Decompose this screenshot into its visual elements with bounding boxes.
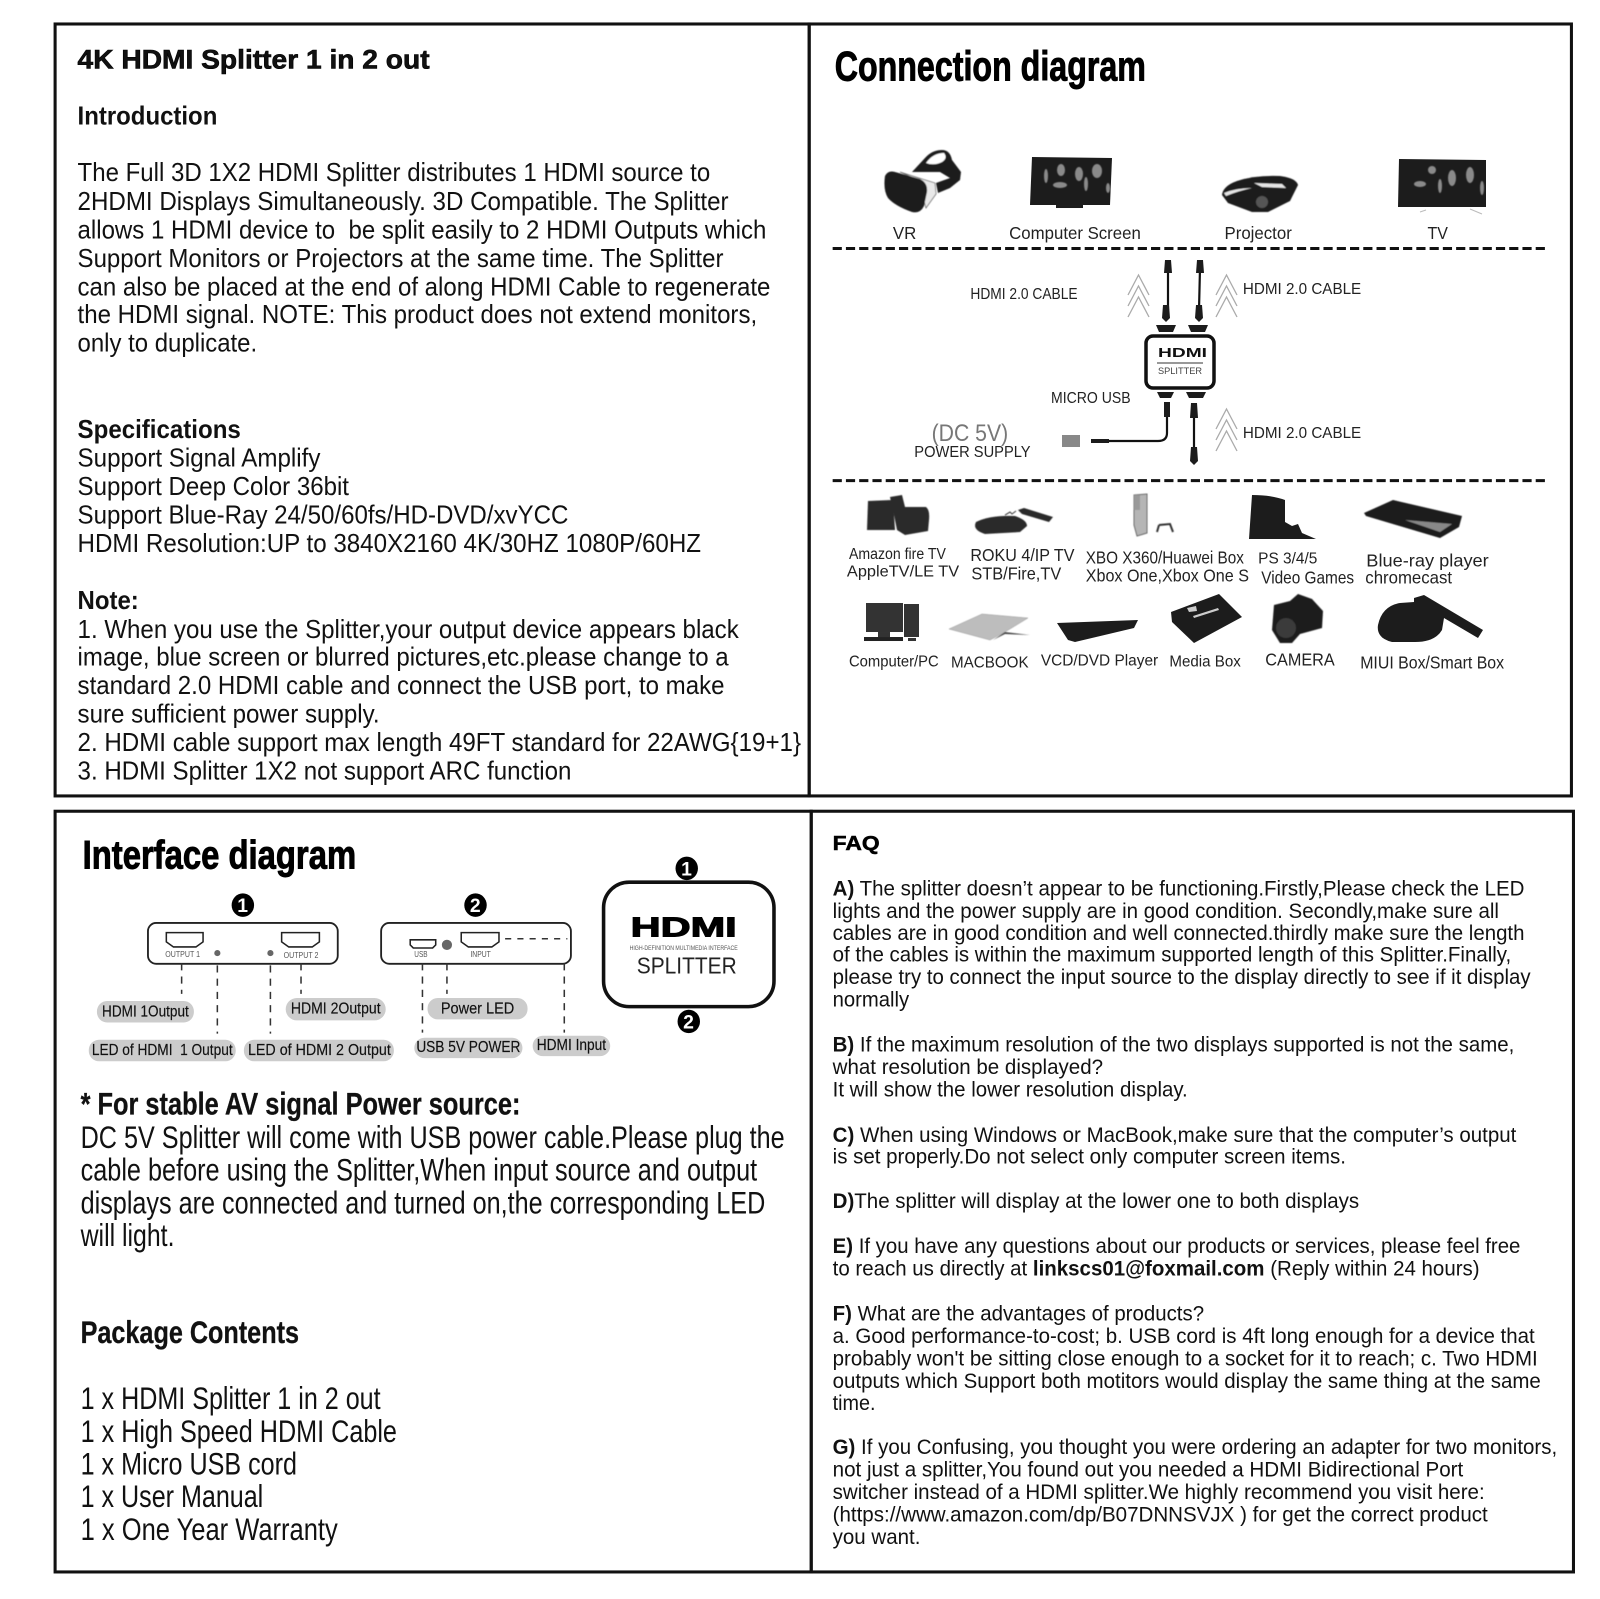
icon: VR headset [884, 150, 961, 212]
icon: splitter large: HDMI [631, 912, 737, 943]
text block: power source: DC 5V Splitter will come with USB power cable.Please plug the [81, 1119, 785, 1155]
text block: answer B [832, 1033, 1514, 1101]
text block: package list: 1 x User Manual [81, 1478, 263, 1514]
label: roku: ROKU 4/IP TV [970, 545, 1075, 565]
heading: specifications: Specifications [78, 416, 241, 444]
heading: interface diagram: Interface diagram [83, 833, 356, 877]
text block: answer E [833, 1234, 1520, 1281]
text block: note: sure sufficient power supply. [78, 700, 380, 728]
text block: note: 3. HDMI Splitter 1X2 not support ARC function [78, 758, 571, 786]
icon: number 1 top: 1 [681, 859, 692, 881]
label: TV: TV [1428, 223, 1448, 243]
panel: connection diagram [833, 43, 1547, 672]
icon: dvd player [1057, 620, 1138, 642]
label: power supply: POWER SUPPLY [914, 444, 1031, 461]
text block: answer G: switcher instead of a HDMI splitter.We highly recommend you visit here: [833, 1480, 1485, 1504]
label: amazon fire tv: Amazon fire TV [849, 546, 947, 563]
text block: answer F: outputs which Support both motitors would display the same thing at the same [833, 1369, 1541, 1393]
heading: connection diagram: Connection diagram [835, 43, 1146, 90]
text block: introduction: the HDMI signal. NOTE: This product does not extend monitors, [78, 301, 757, 329]
icon: number 2 bottom: 2 [683, 1012, 694, 1034]
icon: number 1 [232, 893, 254, 917]
text block: introduction: only to duplicate. [78, 330, 257, 358]
heading: introduction: Introduction [78, 102, 217, 130]
icon: splitter with cables [1062, 260, 1214, 465]
panel: interface diagram [80, 833, 785, 1547]
label: vcd: VCD/DVD Player [1041, 652, 1158, 669]
text block: answer B: what resolution be displayed? [832, 1055, 1103, 1079]
text block: answer G: G) If you Confusing, you thought you were ordering an adapter for two monitors, [833, 1435, 1557, 1459]
label: HDMI cable right: HDMI 2.0 CABLE [1243, 281, 1361, 298]
text block: answer C: is set properly.Do not select only computer screen items. [833, 1144, 1346, 1168]
heading: package contents: Package Contents [81, 1314, 299, 1350]
text block: specifications: Support Blue-Ray 24/50/60fs/HD-DVD/xvYCC [78, 501, 568, 529]
callout: LED of HDMI 2: LED of HDMI 2 Output [248, 1042, 392, 1059]
panel: frame bottom-left [55, 811, 811, 1572]
icon: TV [1398, 159, 1486, 214]
label: DC 5V: (DC 5V) [932, 420, 1008, 447]
text block: answer G: not just a splitter,You found out you needed a HDMI Bidirectional Port [833, 1458, 1463, 1482]
icon: number 2: 2 [470, 895, 481, 917]
icon: computer screen [1030, 157, 1112, 208]
text block: specifications: HDMI Resolution:UP to 3840X2160 4K/30HZ 1080P/60HZ [78, 530, 701, 558]
icon: input side: INPUT [470, 950, 491, 959]
text block: introduction: The Full 3D 1X2 HDMI Splitter distributes 1 HDMI source to [78, 159, 710, 187]
text block: note: 1. When you use the Splitter,your output device appears black [78, 616, 739, 644]
text block: answer G: (https://www.amazon.com/dp/B07DNNSVJX ) for get the correct product [833, 1502, 1488, 1526]
text block: power source: cable before using the Splitter,When input source and output [81, 1152, 757, 1188]
label: xbox: Xbox One,Xbox One S [1086, 566, 1249, 586]
icon: input side: USB [414, 950, 428, 959]
text block: introduction: can also be placed at the end of along HDMI Cable to regenerate [78, 274, 770, 302]
label: VR: VR [893, 223, 916, 243]
icon: splitter large: SPLITTER [637, 952, 737, 978]
label: computer: Computer/PC [849, 653, 939, 670]
text block: answer A [833, 876, 1531, 1012]
label: HDMI cable bottom: HDMI 2.0 CABLE [1243, 425, 1361, 442]
label: playstation [1258, 550, 1354, 588]
label: blu-ray [1365, 550, 1489, 588]
icon: computer [864, 603, 919, 641]
label: media box: Media Box [1169, 653, 1241, 670]
text block: introduction [78, 159, 770, 358]
text block: answer A: of the cables is within the maximum supported length of this Splitter.Finally, [833, 943, 1511, 967]
text block: answer F: probably won't be sitting close enough to a socket for it to reach; c. Two HDMI [833, 1346, 1538, 1370]
label: playstation: Video Games [1261, 568, 1354, 588]
text block: note: 2. HDMI cable support max length 49FT standard for 22AWG{19+1} [78, 729, 801, 757]
text block: answer E: to reach us directly at linkscs01@foxmail.com (Reply within 24 hours) [833, 1257, 1480, 1281]
text block: answer F: a. Good performance-to-cost; b. USB cord is 4ft long enough for a device that [833, 1324, 1535, 1348]
text block: answer A: please try to connect the input source to the display directly to see if it display [833, 965, 1531, 989]
icon: camera [1272, 594, 1323, 643]
text block: answer C: C) When using Windows or MacBook,make sure that the computer’s output [833, 1123, 1516, 1147]
label: playstation: PS 3/4/5 [1258, 550, 1317, 567]
label: HDMI logo small: HDMI [1158, 345, 1207, 360]
heading: FAQ: FAQ [833, 833, 880, 855]
icon: blu-ray player [1364, 500, 1462, 538]
label: xbox [1086, 547, 1249, 586]
text block: answer F: time. [833, 1391, 876, 1415]
callout: power LED [428, 998, 528, 1019]
text block: answer B: It will show the lower resolution display. [833, 1077, 1188, 1101]
panel: frame top-right [809, 24, 1571, 796]
text block: answer B: B) If the maximum resolution of the two displays supported is not the same, [833, 1033, 1514, 1057]
text block: answer A: cables are in good condition and well connected.thirdly make sure the length [833, 921, 1524, 945]
text block: specifications: Support Deep Color 36bit [78, 473, 349, 501]
callout: LED of HDMI 1: LED of HDMI 1 Output [92, 1042, 233, 1059]
text block: answer A: lights and the power supply are in good condition. Secondly,make sure all [833, 899, 1499, 923]
text block: package list: 1 x One Year Warranty [81, 1511, 338, 1547]
label: camera: CAMERA [1265, 649, 1335, 669]
icon: number 1 top [676, 857, 698, 881]
text block: note: standard 2.0 HDMI cable and connect the USB port, to make [78, 672, 724, 700]
text block: answer A: normally [833, 988, 909, 1012]
text block: package list [81, 1380, 397, 1547]
icon: chevrons [1128, 275, 1237, 451]
title: 4K HDMI Splitter 1 in 2 out [78, 44, 430, 74]
text block: package list: 1 x High Speed HDMI Cable [81, 1413, 397, 1449]
label: amazon fire tv [847, 546, 960, 581]
text block: note: image, blue screen or blurred pictures,etc.please change to a [78, 643, 729, 671]
icon: splitter large: HIGH-DEFINITION MULTIMEDIA INTERFACE [630, 945, 738, 952]
text block: specifications: Support Signal Amplify [78, 444, 321, 472]
text block: package list: 1 x Micro USB cord [81, 1445, 297, 1481]
label: roku [970, 545, 1075, 584]
callout: HDMI input: HDMI Input [537, 1037, 607, 1054]
callout: HDMI 1 output: HDMI 1Output [102, 1003, 189, 1020]
text block: answer F: F) What are the advantages of products? [833, 1301, 1204, 1325]
panel: frame bottom-right [811, 811, 1573, 1572]
heading: note: Note: [78, 587, 139, 615]
text block: introduction: 2HDMI Displays Simultaneously. 3D Compatible. The Splitter [78, 188, 729, 216]
text block: introduction: allows 1 HDMI device to be split easily to 2 HDMI Outputs which [78, 216, 766, 244]
text block: answer D: D)The splitter will display at the lower one to both displays [833, 1189, 1359, 1213]
label: HDMI cable left: HDMI 2.0 CABLE [970, 286, 1078, 303]
text block: answer E: E) If you have any questions about our products or services, please feel free [833, 1234, 1520, 1258]
label: macbook: MACBOOK [951, 654, 1029, 671]
text block: power source: will light. [80, 1217, 174, 1253]
text block: answer C [833, 1123, 1516, 1168]
icon: macbook [949, 614, 1030, 640]
panel: introduction and specifications [78, 44, 801, 786]
icon: number 2 [464, 893, 487, 917]
icon: splitter large [604, 882, 774, 1007]
icon: input side [381, 923, 571, 964]
icon: playstation [1249, 495, 1316, 539]
icon: miui box [1378, 595, 1483, 642]
text block: specifications [78, 444, 701, 558]
text block: power source [80, 1119, 785, 1253]
icon: output side [148, 923, 338, 964]
icon: output side: OUTPUT 1 [165, 950, 200, 959]
label: micro USB: MICRO USB [1051, 390, 1131, 407]
icon: projector [1222, 176, 1298, 212]
label: amazon fire tv: AppleTV/LE TV [847, 564, 960, 581]
text block: introduction: Support Monitors or Projectors at the same time. The Splitter [78, 245, 724, 273]
label: splitter small: SPLITTER [1158, 366, 1203, 376]
panel: frame top-left [55, 24, 809, 796]
text block: answer G: you want. [833, 1525, 920, 1549]
label: computer screen: Computer Screen [1009, 223, 1141, 243]
callout: power LED: Power LED [441, 1000, 514, 1017]
callout: HDMI 2 output: HDMI 2Output [291, 1000, 381, 1017]
text block: answer F [833, 1301, 1541, 1415]
icon: number 1: 1 [237, 895, 248, 917]
icon: media box [1171, 594, 1242, 643]
label: blu-ray: chromecast [1365, 568, 1452, 588]
text block: note [78, 616, 801, 786]
icon: amazon fire tv [867, 495, 929, 535]
label: roku: STB/Fire,TV [971, 564, 1062, 584]
callout: USB power: USB 5V POWER [416, 1039, 520, 1056]
label: xbox: XBO X360/Huawei Box [1086, 547, 1244, 567]
label: blu-ray: Blue-ray player [1366, 550, 1489, 570]
label: miui: MIUI Box/Smart Box [1360, 652, 1504, 672]
text block: power source: displays are connected and turned on,the corresponding LED [81, 1184, 765, 1220]
label: projector: Projector [1224, 223, 1292, 243]
panel: FAQ [832, 833, 1557, 1549]
icon: output side: OUTPUT 2 [284, 951, 319, 960]
text block: answer G [833, 1435, 1557, 1549]
text block: answer A: A) The splitter doesn’t appear to be functioning.Firstly,Please check the LED [833, 876, 1524, 900]
heading: stable AV: * For stable AV signal Power source: [81, 1085, 520, 1121]
icon: number 2 bottom [678, 1010, 700, 1034]
icon: xbox [1134, 494, 1173, 536]
text block: package list: 1 x HDMI Splitter 1 in 2 out [81, 1380, 381, 1416]
icon: roku [975, 508, 1053, 534]
